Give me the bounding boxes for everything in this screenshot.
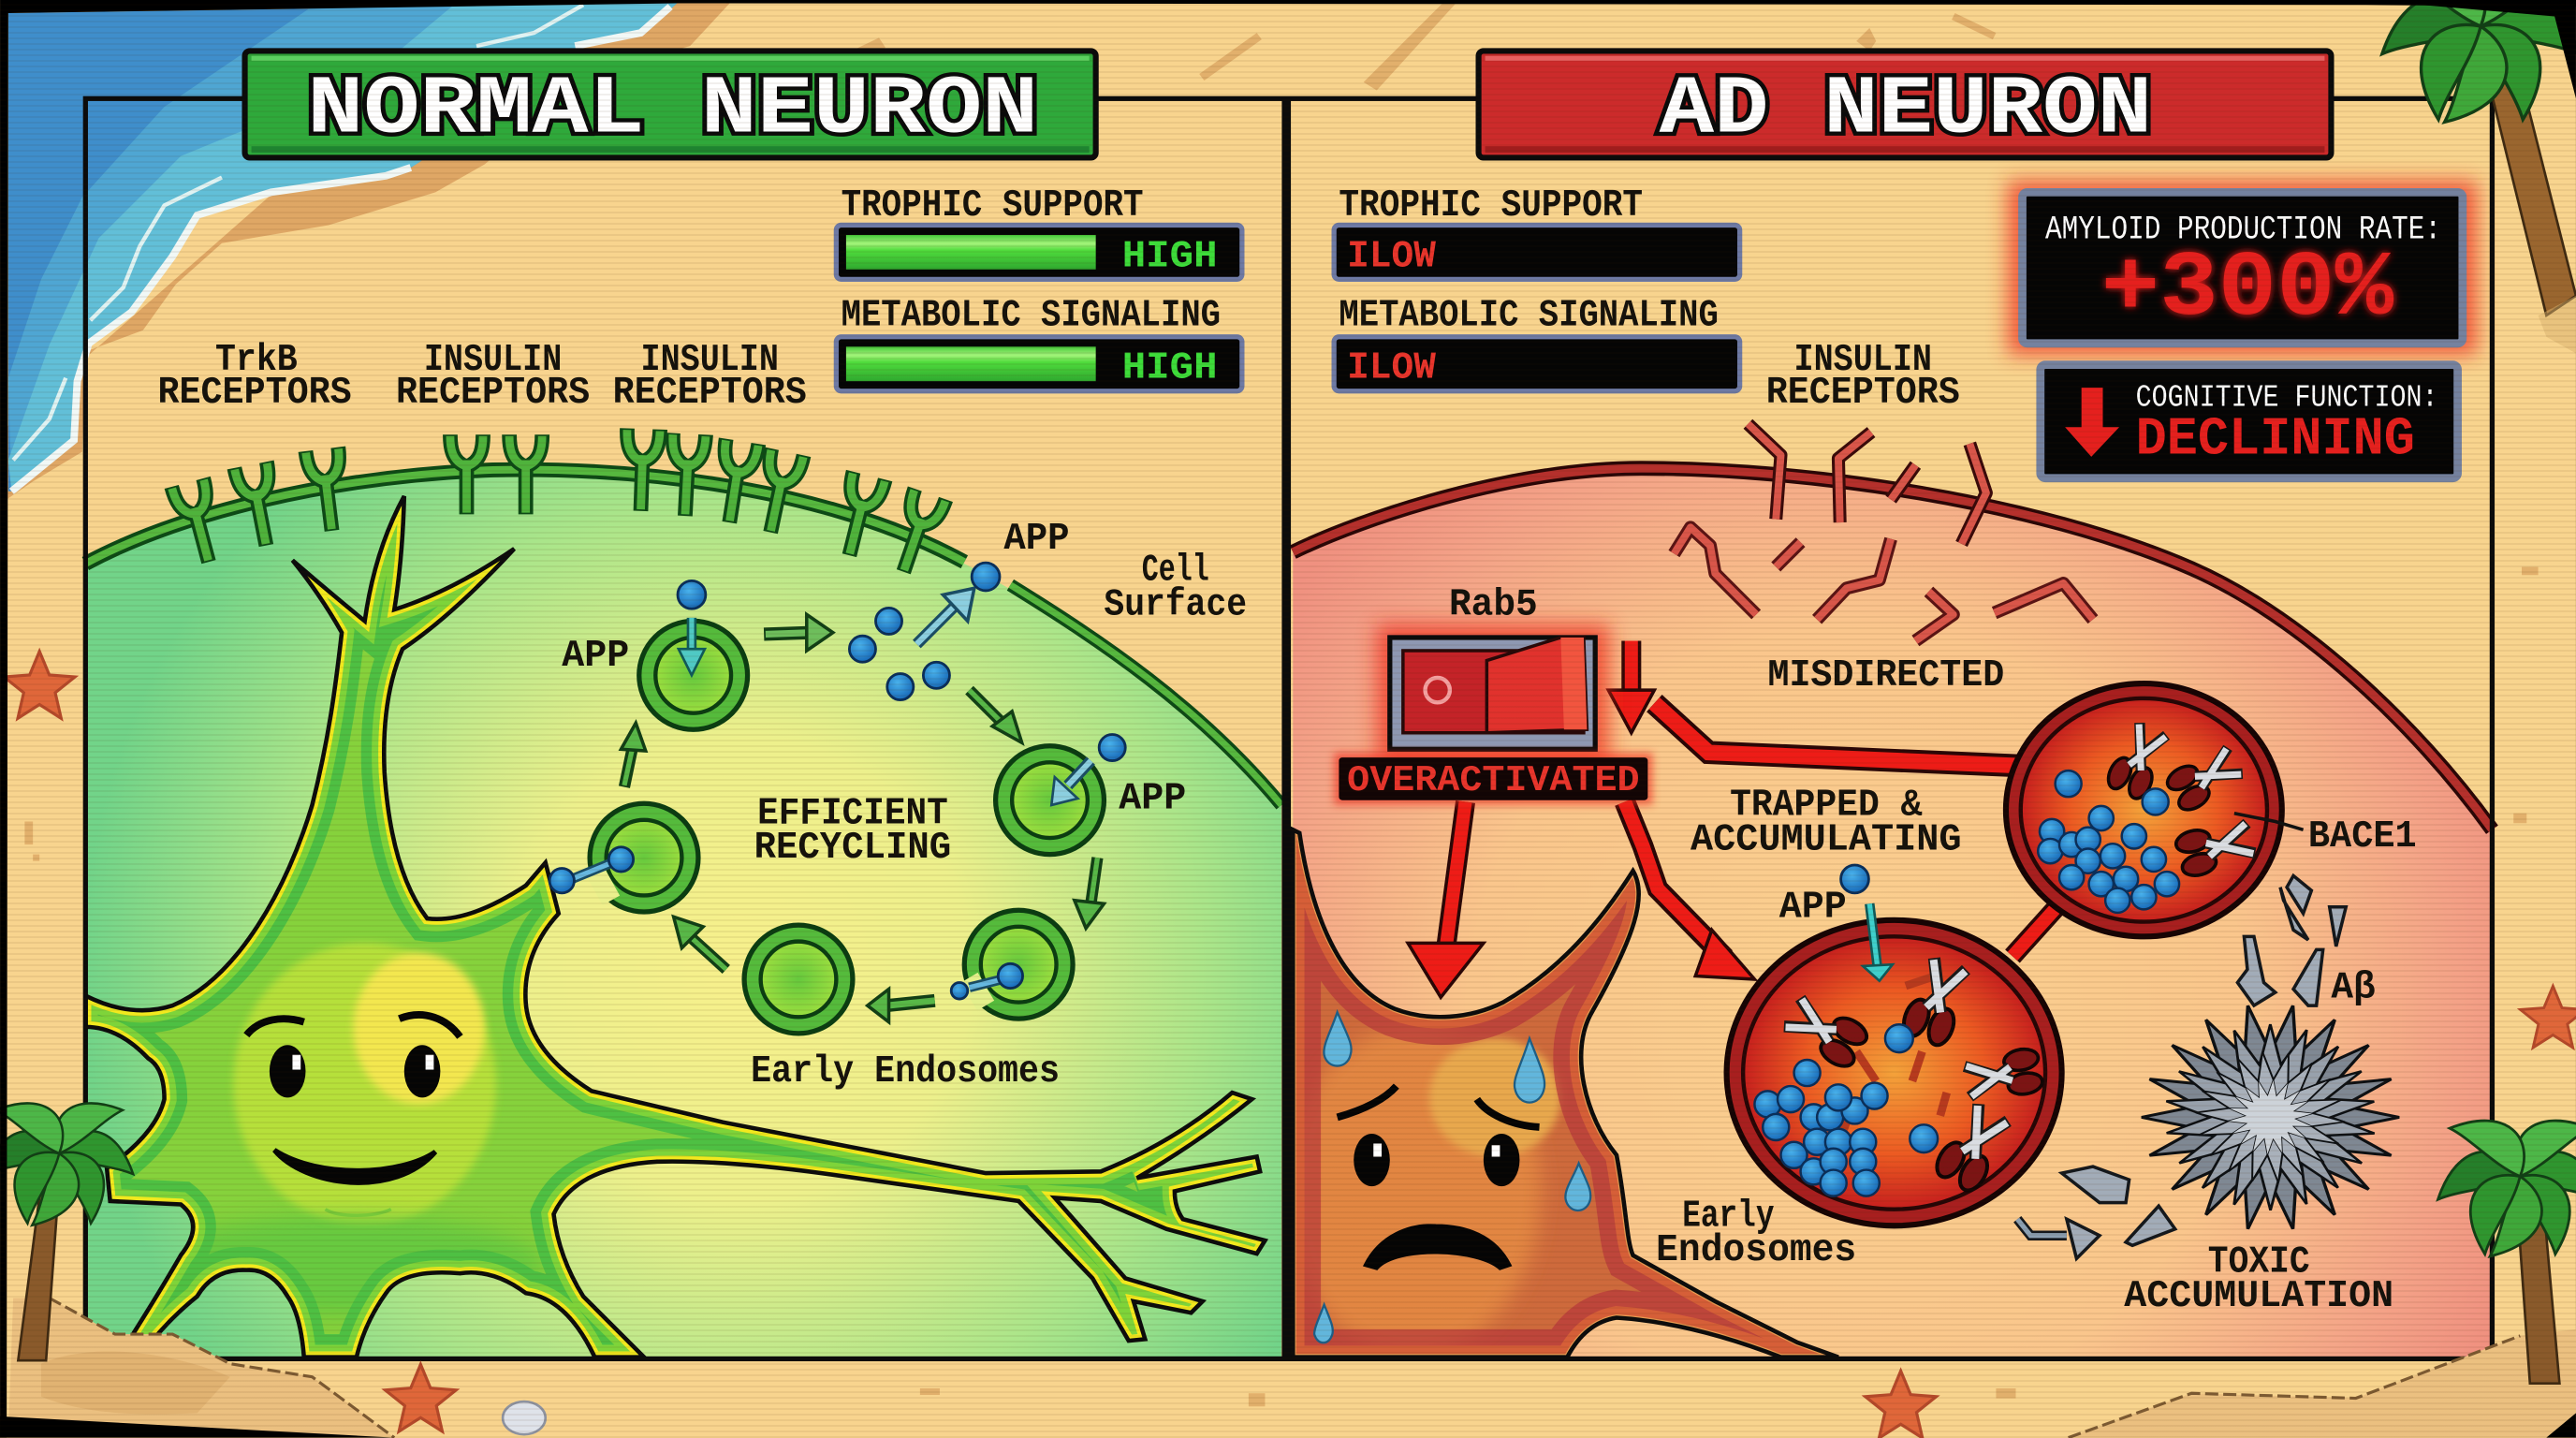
callout: amyloid production rate <box>2008 181 2478 355</box>
heading: AD neuron <box>1479 51 2331 157</box>
right panel: AD neuron <box>1284 181 2492 1358</box>
starfish: left edge <box>4 652 75 718</box>
labels: left panel: INSULIN <box>424 339 562 382</box>
gauge: metabolic signaling (normal): HIGH <box>1122 347 1218 390</box>
labels: right panel: TRAPPED & <box>1730 784 1923 827</box>
endosome lower right <box>964 910 1073 1019</box>
enzymes in upper endosome <box>2104 720 2257 879</box>
APP cluster in big endosome <box>1754 1024 1938 1196</box>
shell <box>503 1401 546 1434</box>
gauge: trophic support (AD): TROPHIC SUPPORT <box>1339 184 1643 227</box>
endosome top <box>639 621 748 729</box>
labels: right panel: Aβ <box>2331 966 2376 1009</box>
endosome cycle <box>549 563 1125 1034</box>
labels: right panel: ACCUMULATING <box>1690 818 1962 861</box>
overactivated tag <box>1334 753 1653 805</box>
labels: right panel: APP <box>1779 886 1847 929</box>
receptors: insulin group 2 <box>624 429 804 536</box>
callout: amyloid production rate: +300% <box>2101 237 2394 342</box>
labels: left panel: RECEPTORS <box>613 372 807 415</box>
upper endosome with BACE1 <box>2006 683 2304 936</box>
receptors: insulin group 1 <box>450 434 542 514</box>
palm tree: top right <box>2382 0 2576 353</box>
labels: left panel <box>158 339 1247 1093</box>
Rab5 switch <box>1377 624 1610 762</box>
left panel: normal neuron <box>85 184 1281 1358</box>
endosome right <box>996 746 1104 855</box>
labels: right panel: Early <box>1682 1195 1774 1238</box>
labels: left panel: Early Endosomes <box>751 1050 1060 1093</box>
heading: normal neuron: NORMAL NEURON <box>307 64 1038 156</box>
labels: left panel: APP <box>1003 518 1070 561</box>
labels: right panel: ACCUMULATION <box>2124 1275 2393 1318</box>
endosome bottom <box>744 925 853 1034</box>
sand dune: bottom left <box>8 1298 394 1438</box>
overactivated tag: OVERACTIVATED <box>1347 760 1640 801</box>
labels: left panel: RECEPTORS <box>158 372 352 415</box>
labels: left panel: Surface <box>1104 583 1247 626</box>
amyloid beta shards <box>2017 875 2346 1258</box>
receptors: TrkB <box>171 448 348 566</box>
gauge: trophic support (AD) <box>1334 184 1740 279</box>
neuron body character <box>85 496 1265 1357</box>
APP molecules <box>549 563 1125 999</box>
BACE1 pointer <box>2234 814 2304 829</box>
big early endosome <box>1727 865 2062 1225</box>
APP cluster in upper endosome <box>2038 770 2179 913</box>
heading: AD neuron: AD NEURON <box>1660 64 2152 156</box>
broken receptors <box>1748 424 1986 544</box>
receptors: outer pair <box>833 472 945 577</box>
labels: left panel: EFFICIENT <box>757 792 948 835</box>
gauge: metabolic signaling (normal) <box>836 294 1242 391</box>
cell membrane <box>85 470 1281 805</box>
labels: left panel: INSULIN <box>641 339 779 382</box>
labels: right panel: TOXIC <box>2208 1240 2310 1284</box>
APP transport arrows <box>572 588 1090 988</box>
callout: cognitive function declining: COGNITIVE FUNCTION: <box>2136 380 2438 416</box>
labels: right panel: RECEPTORS <box>1766 372 1960 415</box>
starfish: bottom centre <box>1866 1371 1937 1438</box>
labels: left panel: APP <box>1119 777 1186 820</box>
labels: left panel: APP <box>562 635 629 678</box>
damaged cell interior <box>1293 468 2492 1358</box>
gauge: trophic support (normal): HIGH <box>1122 235 1218 278</box>
sad neuron body character <box>1284 829 1838 1357</box>
sea and shoreline <box>7 0 733 500</box>
endosome left <box>590 803 698 912</box>
labels: left panel: TrkB <box>215 339 298 382</box>
labels: right panel: BACE1 <box>2308 815 2417 858</box>
gauge: metabolic signaling (AD) <box>1334 294 1740 391</box>
gauge: metabolic signaling (AD): ILOW <box>1347 347 1437 390</box>
callout: cognitive function declining <box>2041 365 2458 478</box>
labels: right panel: Endosomes <box>1656 1229 1856 1272</box>
callout: cognitive function declining: DECLINING <box>2136 409 2415 470</box>
sand dune: bottom right <box>2069 1329 2576 1438</box>
starfish: bottom left <box>385 1364 456 1431</box>
labels: left panel: RECEPTORS <box>396 372 590 415</box>
palm tree: bottom right <box>2438 1097 2576 1384</box>
sweat drops <box>1314 1012 1590 1343</box>
labels: right panel: Rab5 <box>1449 583 1538 626</box>
gauge: trophic support (normal): TROPHIC SUPPORT <box>842 184 1144 227</box>
heading: normal neuron <box>245 51 1096 157</box>
gauge: metabolic signaling (normal): METABOLIC SIGNALING <box>842 294 1221 337</box>
gauge: metabolic signaling (AD): METABOLIC SIGNALING <box>1339 294 1719 337</box>
gauge: trophic support (normal) <box>836 184 1242 279</box>
damaged membrane <box>1293 468 2492 829</box>
labels: left panel: Cell <box>1142 550 1209 593</box>
gauge: trophic support (AD): ILOW <box>1347 235 1437 278</box>
happy face <box>246 1015 460 1215</box>
toxic amyloid plaque <box>2142 1005 2399 1229</box>
palm tree: bottom left <box>0 1082 133 1360</box>
labels: right panel: MISDIRECTED <box>1767 654 2004 697</box>
callout: amyloid production rate: AMYLOID PRODUCTION RATE: <box>2045 211 2441 248</box>
enzymes in big endosome <box>1780 955 2044 1196</box>
labels: left panel: RECYCLING <box>754 827 951 870</box>
APP entering arrow <box>1841 865 1893 981</box>
labels: right panel <box>1449 339 2417 1318</box>
callout: amyloid production rate: +300% <box>2101 237 2394 342</box>
red pathway arrows <box>1408 640 2056 997</box>
cycle arrows <box>621 614 1104 1022</box>
starfish: right edge <box>2521 986 2576 1048</box>
sad face <box>1338 1086 1540 1269</box>
labels: right panel: INSULIN <box>1794 339 1932 382</box>
misdirected receptors <box>1674 527 2093 640</box>
cell interior with membrane <box>85 470 1281 1358</box>
